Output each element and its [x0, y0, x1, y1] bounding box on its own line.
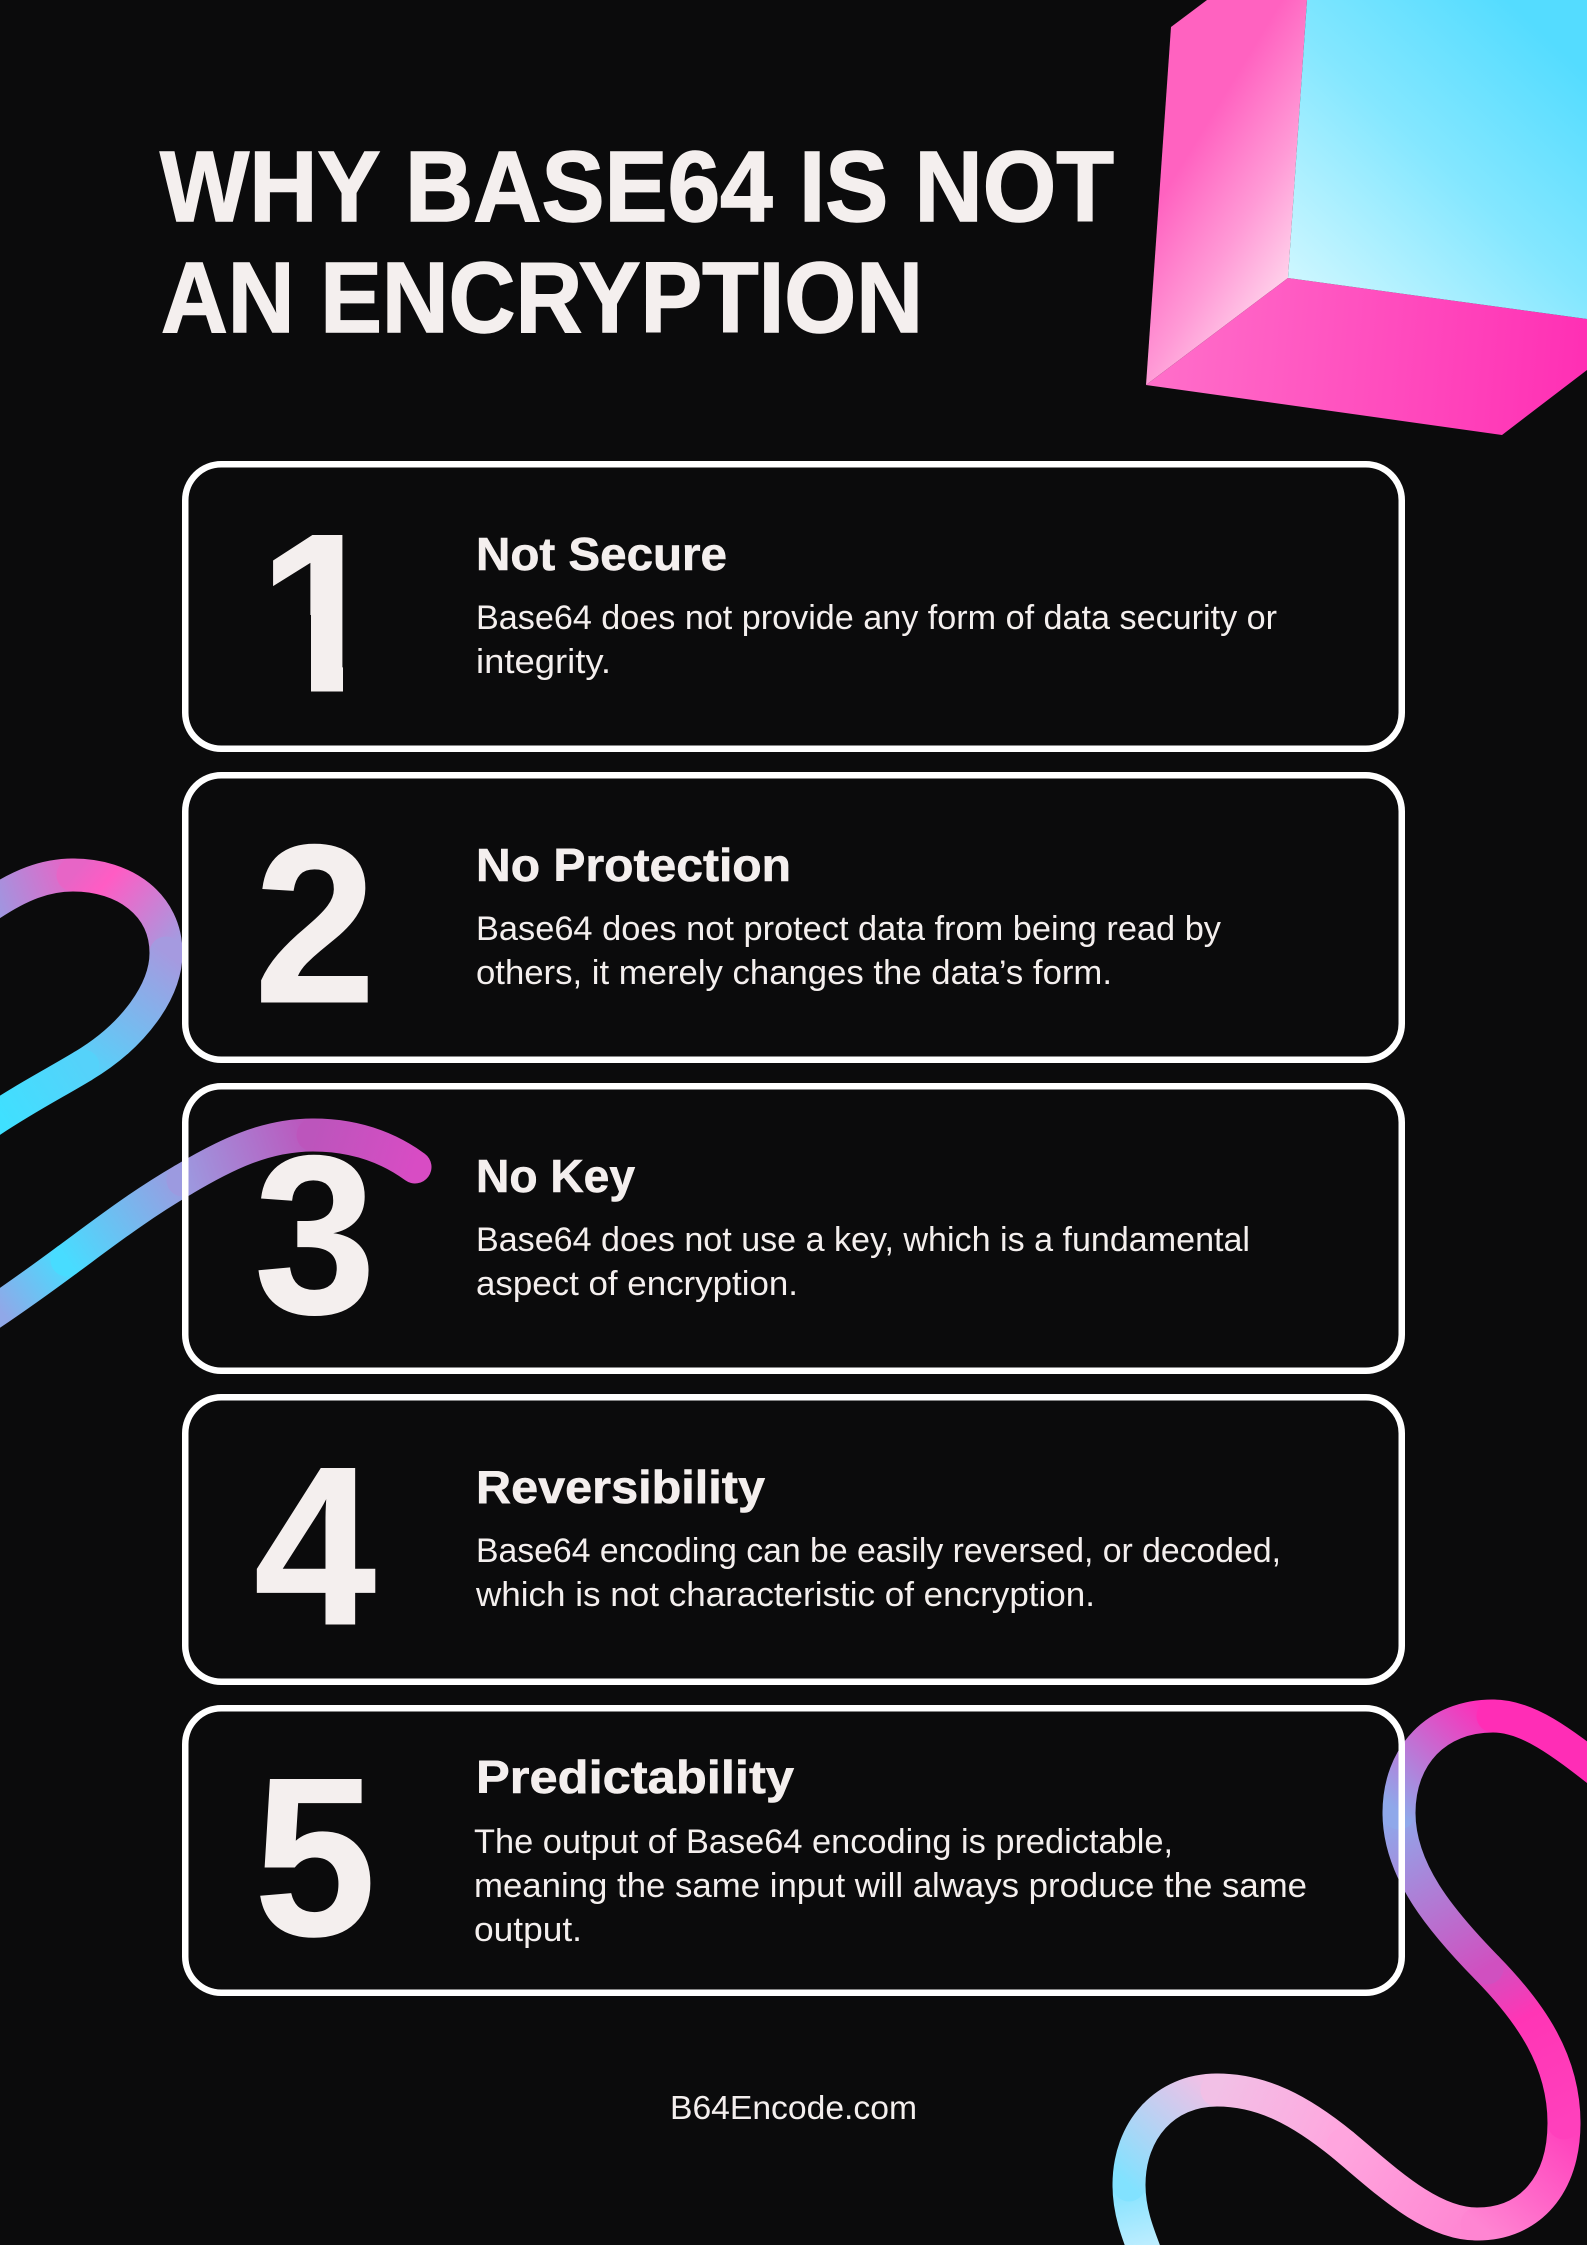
ribbon: upper left loop: [0, 875, 166, 1125]
panel: 3 No Key: [185, 1086, 1402, 1371]
heading: No Protection: [476, 839, 791, 891]
title: WHY BASE64 IS NOT: [160, 131, 1114, 243]
body text: integrity.: [476, 643, 611, 681]
number 4: 4: [254, 1419, 376, 1672]
body text: meaning the same input will always produce the same: [474, 1867, 1307, 1905]
panel: 5 Predictability: [185, 1708, 1402, 1993]
title: [160, 131, 1114, 354]
title: AN ENCRYPTION: [161, 242, 923, 354]
number 2: 2: [254, 797, 376, 1050]
body text: The output of Base64 encoding is predictable,: [474, 1823, 1173, 1861]
body text: [476, 599, 1277, 681]
body text: [476, 910, 1221, 992]
card border: [185, 1086, 1402, 1371]
heading: Not Secure: [476, 528, 727, 580]
ribbon: sweep into card 3: [0, 1135, 415, 1318]
body text: output.: [474, 1911, 582, 1949]
icon: 3D cube, top right: [1146, 0, 1587, 435]
panel: 1 Not Secure: [185, 464, 1402, 749]
card border: [185, 464, 1402, 749]
body text: which is not characteristic of encryption.: [475, 1576, 1095, 1614]
body text: others, it merely changes the data’s form.: [476, 954, 1112, 992]
panel: 4 Reversibility: [185, 1397, 1402, 1682]
card border: [185, 1397, 1402, 1682]
body text: [475, 1532, 1281, 1614]
body text: Base64 does not provide any form of data security or: [476, 599, 1277, 637]
body text: Base64 does not protect data from being read by: [476, 910, 1221, 948]
ribbon: lower right S curve: [1129, 1716, 1587, 2245]
footer: website: B64Encode.com: [670, 2089, 917, 2126]
number 1: 1: [258, 486, 384, 739]
heading: Predictability: [476, 1751, 794, 1803]
card border: [185, 1708, 1402, 1993]
number 3: 3: [254, 1108, 376, 1361]
body text: aspect of encryption.: [476, 1265, 798, 1303]
number 5: 5: [254, 1730, 376, 1983]
heading: Reversibility: [476, 1461, 765, 1513]
body text: Base64 does not use a key, which is a fundamental: [476, 1221, 1250, 1259]
body text: [476, 1221, 1250, 1303]
panel: 2 No Protection: [185, 775, 1402, 1060]
body text: [474, 1823, 1307, 1949]
body text: Base64 encoding can be easily reversed, or decoded,: [476, 1532, 1281, 1570]
heading: No Key: [476, 1150, 635, 1202]
card border: [185, 775, 1402, 1060]
